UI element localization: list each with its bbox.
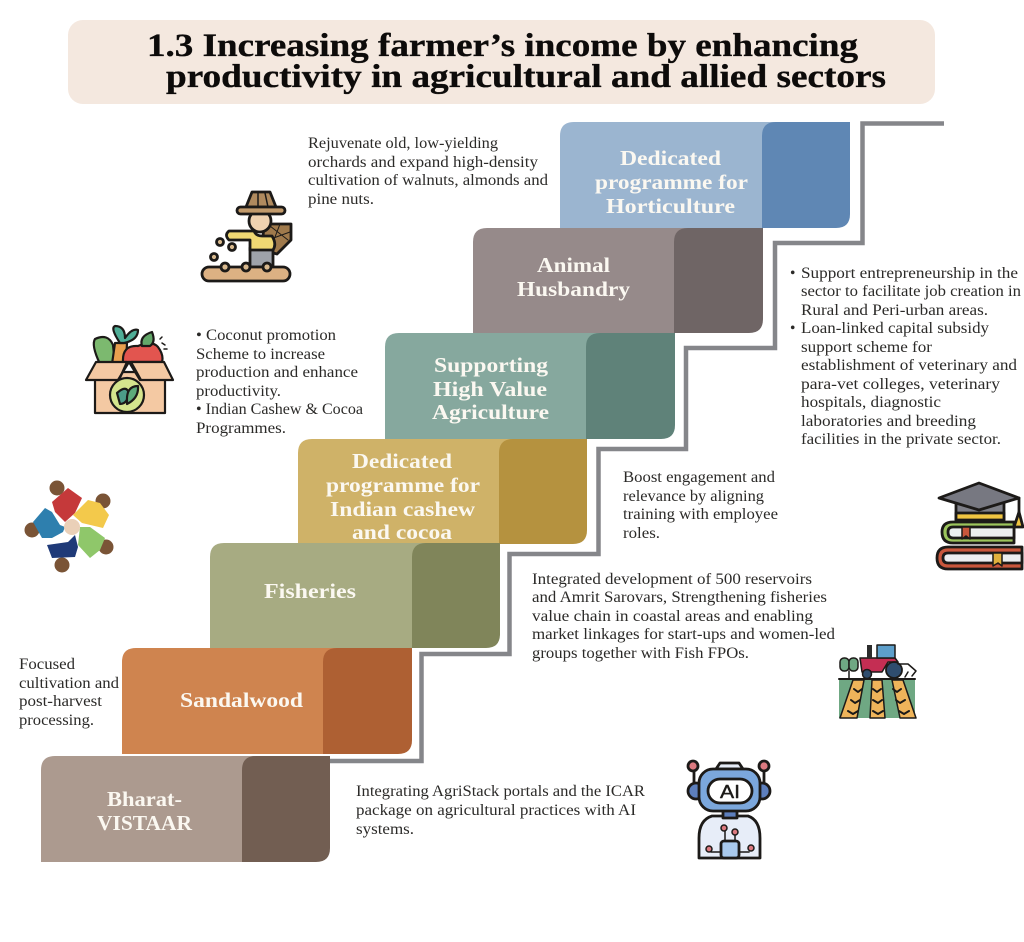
step 5: Supporting High Value Agriculture: Supporting <box>434 353 549 377</box>
text: high value agriculture description <box>196 327 363 437</box>
text: animal husbandry description: support scheme for <box>801 339 933 356</box>
text: horticulture description: pine nuts. <box>308 191 374 208</box>
icon: farmer sowing seeds <box>202 192 291 281</box>
text: sandalwood description: cultivation and <box>19 675 119 692</box>
text: animal husbandry description: laboratories and breeding <box>801 413 976 430</box>
text: animal husbandry description: • <box>790 265 795 282</box>
step 7: Horticulture: Dedicated <box>620 146 721 170</box>
step 4: Dedicated programme for Indian cashew and cocoa: programme for <box>326 473 480 497</box>
step 6: Animal Husbandry: Animal <box>537 253 610 277</box>
text: high value agriculture description: Programmes. <box>196 420 286 437</box>
step 7: Horticulture: Horticulture <box>606 194 735 218</box>
text: horticulture description: orchards and expand high-density <box>308 154 538 171</box>
step 1: Bharat-VISTAAR <box>41 756 330 862</box>
step 1: Bharat-VISTAAR: Bharat- <box>107 787 182 811</box>
step 3: Fisheries <box>210 543 500 648</box>
text: animal husbandry description: sector to facilitate job creation in <box>801 283 1021 300</box>
text: training description <box>623 469 778 542</box>
step 6: Animal Husbandry <box>473 228 763 333</box>
step 2: Sandalwood: Sandalwood <box>180 688 303 712</box>
text: high value agriculture description: productivity. <box>196 383 281 400</box>
text: animal husbandry description <box>790 265 1021 448</box>
text: Bharat-VISTAAR description: package on agricultural practices with AI <box>356 802 636 819</box>
step 7: Horticulture: programme for <box>595 170 748 194</box>
step 1: Bharat-VISTAAR: VISTAAR <box>97 811 193 835</box>
step 5: Supporting High Value Agriculture <box>385 333 675 439</box>
text: animal husbandry description: Rural and Peri-urban areas. <box>801 302 988 319</box>
step 5: Supporting High Value Agriculture: High Value <box>433 377 547 401</box>
text: animal husbandry description: Loan-linked capital subsidy <box>801 320 989 337</box>
text: animal husbandry description: Support entrepreneurship in the <box>801 265 1018 282</box>
text: horticulture description: cultivation of walnuts, almonds and <box>308 172 548 189</box>
icon: team circle <box>24 480 114 572</box>
text: high value agriculture description: • Indian Cashew & Cocoa <box>196 401 363 418</box>
text: animal husbandry description: facilities in the private sector. <box>801 431 1001 448</box>
text: Bharat-VISTAAR description <box>356 783 646 838</box>
staircase outline arrow <box>328 124 944 761</box>
text: fisheries description: value chain in coastal areas and enabling <box>532 608 813 625</box>
text: animal husbandry description: establishment of veterinary and <box>801 357 1017 374</box>
text: fisheries description: market linkages for start-ups and women-led <box>532 626 835 643</box>
text: Bharat-VISTAAR description: systems. <box>356 821 414 838</box>
icon: AI robot <box>688 761 770 858</box>
text: sandalwood description: post-harvest <box>19 693 103 710</box>
step 7: Horticulture <box>560 122 850 228</box>
text: animal husbandry description: para-vet colleges, veterinary <box>801 376 1000 393</box>
text: sandalwood description: processing. <box>19 712 94 729</box>
step 2: Sandalwood <box>122 648 412 754</box>
step 4: Dedicated programme for Indian cashew and cocoa <box>298 439 587 544</box>
text: high value agriculture description: production and enhance <box>196 364 358 381</box>
text: training description: Boost engagement and <box>623 469 775 486</box>
text: fisheries description <box>532 571 835 662</box>
icon: tractor in field <box>839 645 916 718</box>
text: training description: roles. <box>623 525 660 542</box>
text: sandalwood description: Focused <box>19 656 75 673</box>
icon: produce box <box>86 326 173 413</box>
title banner: 1.3 Increasing farmer’s income by enhancing <box>147 28 859 64</box>
text: horticulture description <box>308 135 548 208</box>
text: Bharat-VISTAAR description: Integrating AgriStack portals and the ICAR <box>356 783 646 800</box>
icon: AI robot: AI <box>720 782 740 802</box>
text: training description: relevance by aligning <box>623 488 764 505</box>
text: fisheries description: and Amrit Sarovars, Strengthening fisheries <box>532 589 827 606</box>
text: horticulture description: Rejuvenate old, low-yielding <box>308 135 498 152</box>
step 5: Supporting High Value Agriculture: Agriculture <box>432 400 549 424</box>
text: animal husbandry description: hospitals, diagnostic <box>801 394 941 411</box>
step 3: Fisheries: Fisheries <box>264 579 356 603</box>
icon: graduation cap on books <box>937 483 1023 569</box>
text: animal husbandry description: • <box>790 320 795 337</box>
text: high value agriculture description: • Coconut promotion <box>196 327 336 344</box>
text: high value agriculture description: Scheme to increase <box>196 346 325 363</box>
text: fisheries description: Integrated development of 500 reservoirs <box>532 571 812 588</box>
title banner: productivity in agricultural and allied sectors <box>166 59 886 95</box>
step 4: Dedicated programme for Indian cashew and cocoa: Dedicated <box>352 449 452 473</box>
text: fisheries description: groups together with Fish FPOs. <box>532 645 749 662</box>
step 6: Animal Husbandry: Husbandry <box>517 277 631 301</box>
text: training description: training with employee <box>623 506 778 523</box>
title banner <box>68 20 935 104</box>
step 4: Dedicated programme for Indian cashew and cocoa: Indian cashew <box>330 497 476 521</box>
text: sandalwood description <box>19 656 119 729</box>
step 4: Dedicated programme for Indian cashew and cocoa: and cocoa <box>352 520 453 544</box>
